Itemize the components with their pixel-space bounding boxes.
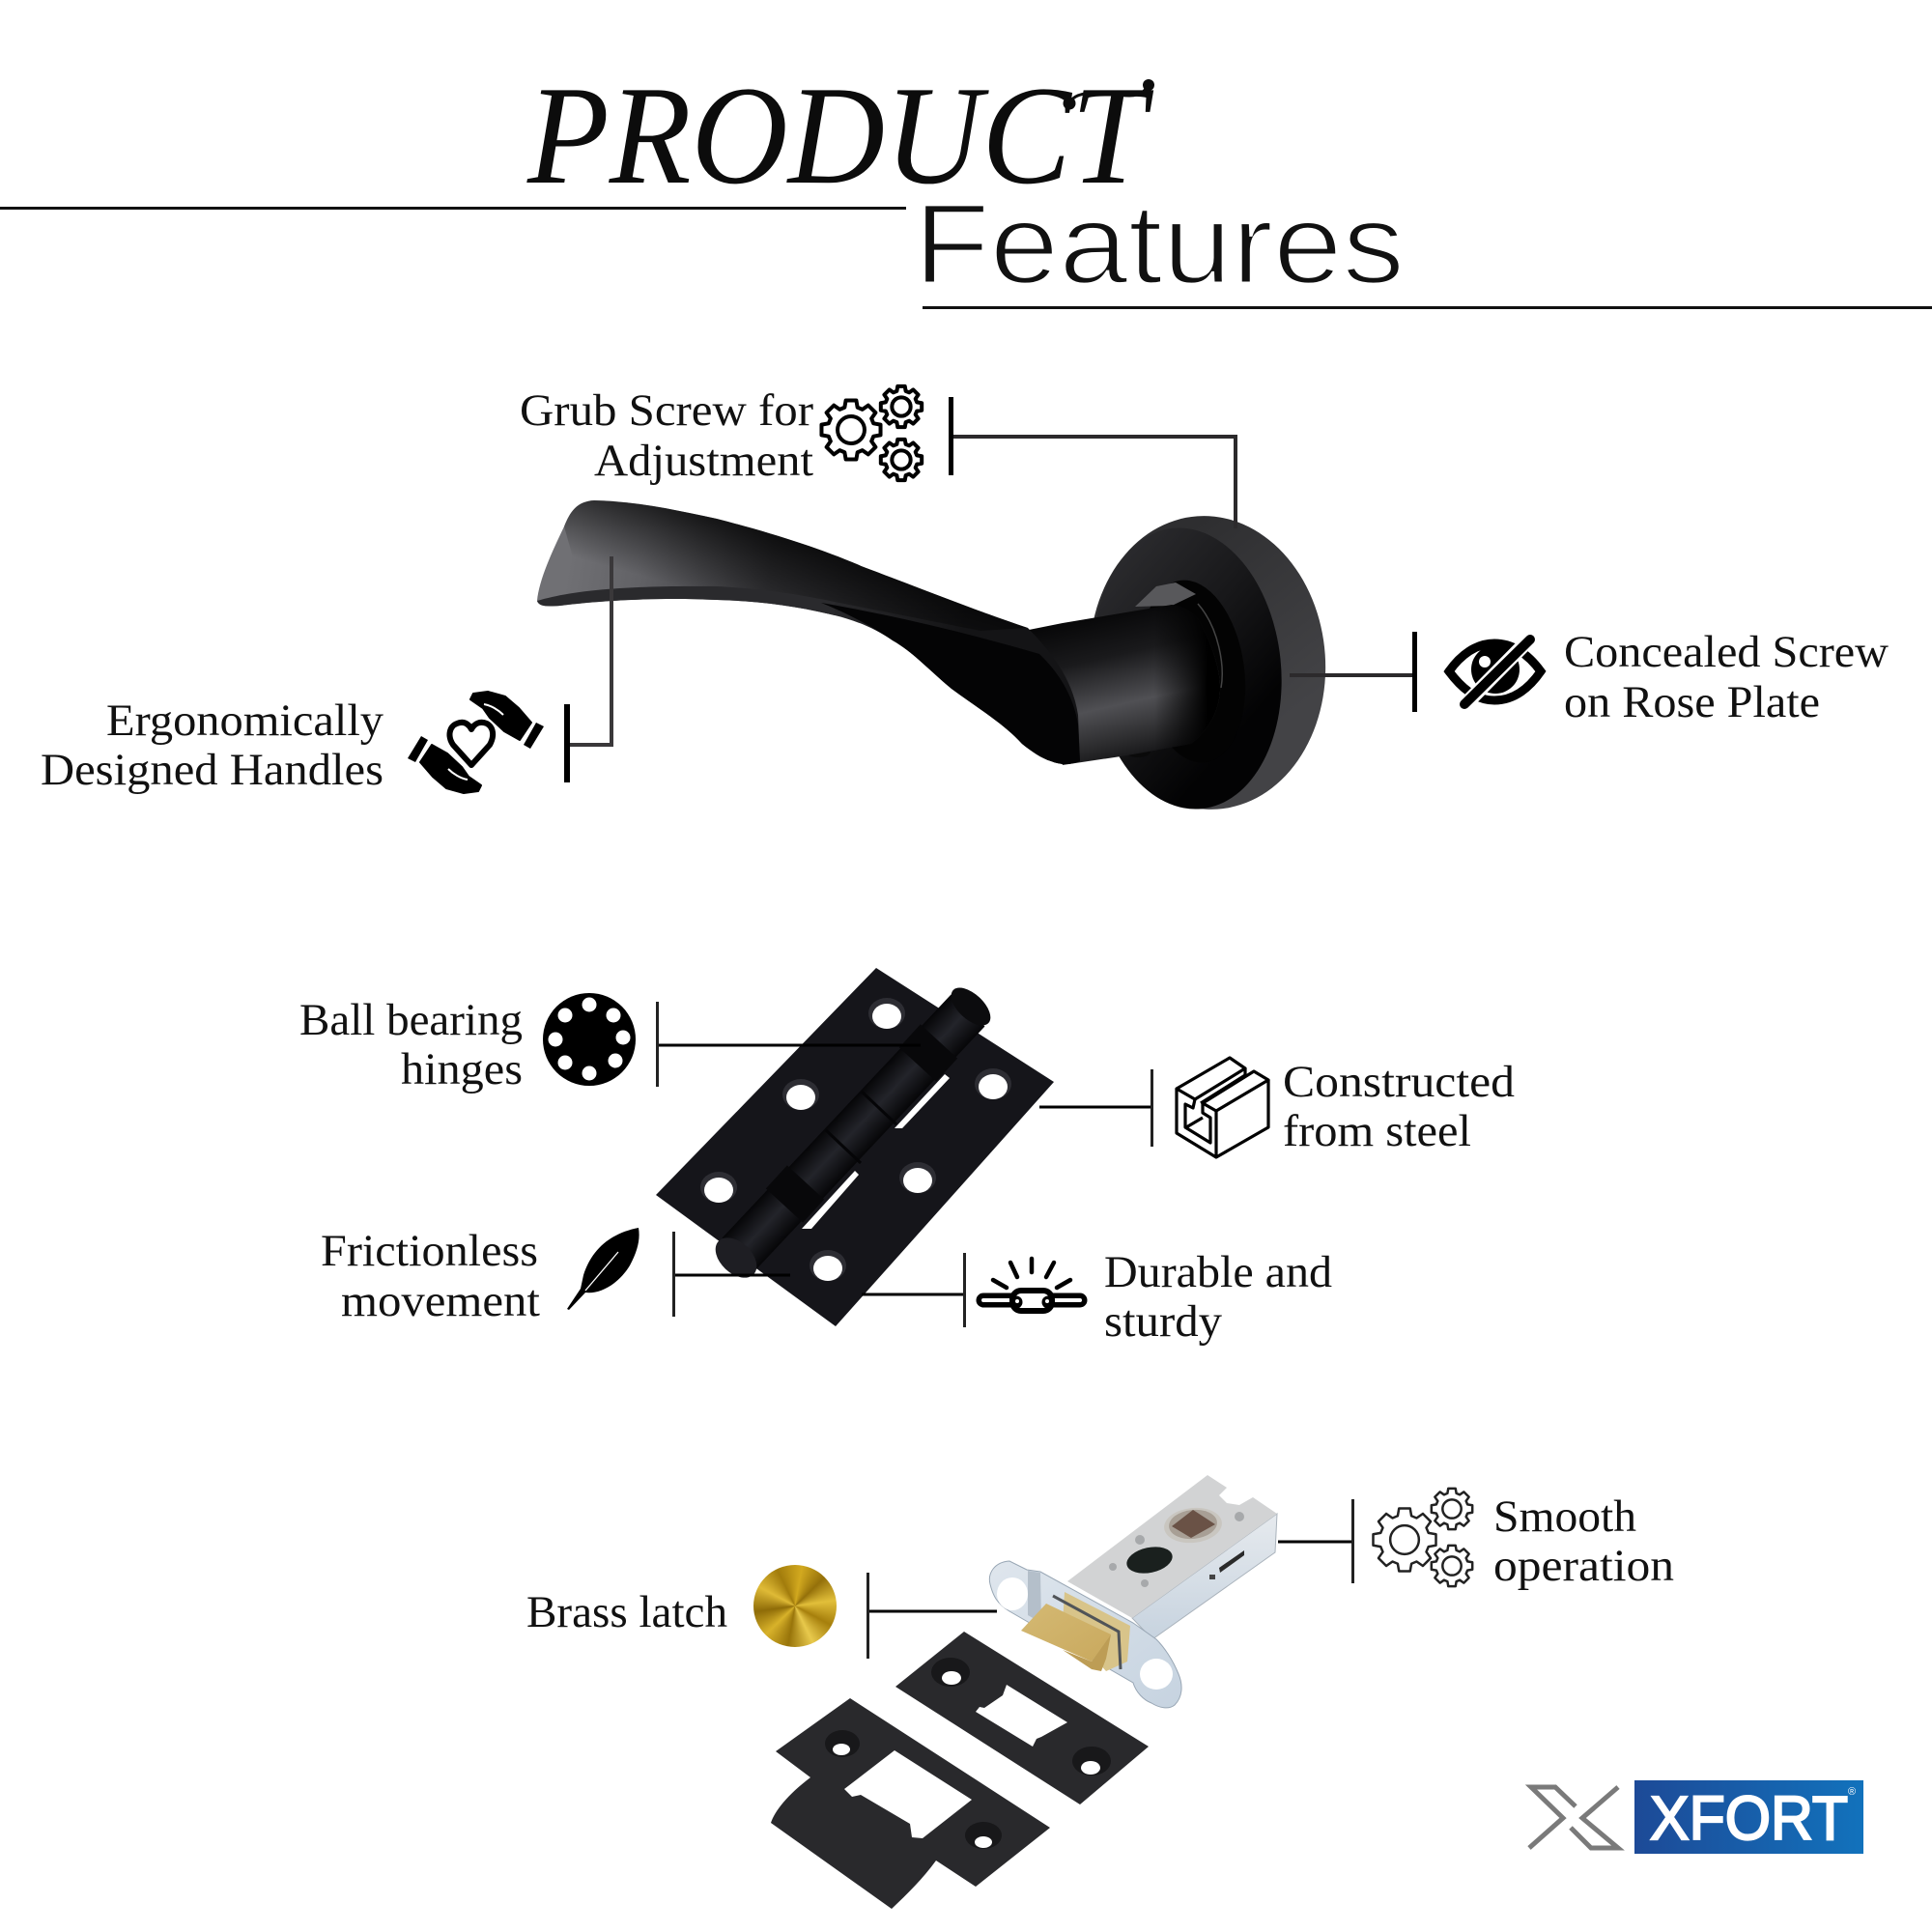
latch flange fold [1028, 1571, 1041, 1623]
latch spindle hole [1162, 1505, 1224, 1546]
text: ball bearing label: hinges [401, 1044, 523, 1094]
icon: ball bearing [543, 993, 636, 1086]
connector bar: ball bearing [656, 1002, 659, 1087]
latch face plate [989, 1561, 1181, 1708]
text: steel label [1283, 1057, 1515, 1156]
icon: crossed eye [1449, 635, 1541, 709]
hinge lower collar [784, 1182, 806, 1206]
text: frictionless label: movement [341, 1276, 540, 1326]
logo registered mark: ® [1848, 1786, 1856, 1798]
handle neck shade [1154, 605, 1220, 751]
lever top shade [564, 500, 1028, 631]
text: ergonomic label: Designed Handles [41, 745, 384, 795]
latch side slot [1219, 1550, 1244, 1573]
lever body [537, 500, 1080, 764]
connector: steel [1039, 1105, 1151, 1109]
strike plate lower slot [844, 1750, 972, 1838]
hinge pin barrel [739, 1010, 968, 1254]
latch brass backing [1063, 1592, 1130, 1671]
connector bar: smooth operation [1351, 1499, 1354, 1583]
callout: frictionless movement [321, 1226, 790, 1326]
strike plate upper slot [976, 1685, 1067, 1747]
callout: concealed screw [1290, 627, 1889, 727]
text: steel label: from steel [1283, 1106, 1471, 1156]
icon: gears thin [1373, 1489, 1472, 1586]
text: brass latch label: Brass latch [526, 1587, 727, 1637]
latch bolt end [1063, 1634, 1111, 1671]
product: tubular latch [989, 1475, 1277, 1708]
connector bar: ergonomic [564, 704, 570, 782]
lever lower rim [537, 586, 835, 615]
connector: brass latch [867, 1609, 997, 1613]
connector bar: steel [1151, 1069, 1153, 1147]
text: grub screw label [520, 385, 813, 486]
connector: grub screw [951, 437, 1236, 528]
logo text: XFORT [1650, 1783, 1848, 1853]
latch side face [1132, 1514, 1277, 1639]
text: durable label: sturdy [1104, 1296, 1223, 1347]
connector bar: grub screw [949, 397, 953, 475]
icon: feather [567, 1228, 639, 1310]
connector: frictionless [673, 1273, 790, 1277]
callout: constructed from steel [1039, 1057, 1515, 1157]
connector: durable [862, 1293, 964, 1296]
logo mark: X [1529, 1787, 1618, 1848]
hinge countersinks [700, 998, 1011, 1281]
latch brass bolt [1021, 1604, 1111, 1662]
callout: ball bearing hinges [299, 993, 921, 1094]
text: smooth operation label [1493, 1492, 1674, 1591]
text: frictionless label [321, 1226, 540, 1326]
icon: chain with rays [983, 1259, 1080, 1311]
latch top face [1067, 1475, 1277, 1618]
icon: gears [821, 386, 922, 480]
handle lever [537, 500, 1080, 764]
logo badge [1634, 1780, 1863, 1854]
title flourish [1063, 79, 1154, 110]
product: strike plate upper [895, 1632, 1149, 1804]
hinge plate [656, 968, 1054, 1326]
handle small screw [1125, 746, 1151, 757]
callout: brass latch [526, 1573, 997, 1659]
text: ergonomic label: Ergonomically [106, 696, 384, 746]
product: hinge [656, 968, 1054, 1326]
callout: ergonomic handles [41, 556, 611, 795]
text: ergonomic label [41, 696, 384, 795]
latch side slot small [1209, 1575, 1215, 1579]
text: ball bearing label [299, 995, 523, 1094]
text: smooth operation label: operation [1493, 1541, 1674, 1591]
connector bar: frictionless [672, 1232, 675, 1317]
handle rose plate rim [1080, 508, 1335, 817]
hinge knuckle rings [826, 1092, 896, 1163]
product: strike plate lower [771, 1698, 1050, 1909]
icon: hands holding heart [408, 692, 544, 793]
text: grub screw label: Adjustment [594, 436, 813, 486]
lever black facet [821, 603, 1080, 764]
callout: grub screw [520, 385, 1236, 528]
strike plate lower holes [825, 1730, 1002, 1849]
text: durable label [1104, 1247, 1332, 1347]
text: steel label: Constructed [1283, 1057, 1515, 1107]
icon: steel channel [1177, 1058, 1268, 1157]
connector bar: durable [963, 1253, 966, 1327]
text: concealed screw label: Concealed Screw [1564, 627, 1889, 677]
text: grub screw label: Grub Screw for [520, 385, 813, 436]
connector: ball bearing [657, 1043, 921, 1047]
connector: ergonomic [567, 556, 611, 745]
text: ball bearing label: Ball bearing [299, 995, 523, 1045]
text: durable label: Durable and [1104, 1247, 1332, 1297]
text: concealed screw label: on Rose Plate [1564, 677, 1820, 727]
text: concealed screw label [1564, 627, 1889, 727]
latch bolt holder [1053, 1596, 1121, 1669]
handle recess highlight [1135, 582, 1196, 607]
callout: smooth operation [1278, 1489, 1674, 1591]
hinge screw holes [704, 1004, 1008, 1281]
latch ear holes [997, 1577, 1028, 1610]
handle inner recess [1129, 574, 1257, 769]
connector: concealed screw [1290, 673, 1414, 677]
strike plate upper holes [931, 1658, 1111, 1776]
title word: Features: Features [914, 181, 1405, 308]
connector bar: brass latch [867, 1573, 869, 1659]
callout: durable and sturdy [862, 1247, 1332, 1347]
latch rivets [1109, 1512, 1244, 1587]
handle rose plate face [1079, 519, 1295, 818]
hinge upper collar [918, 1041, 939, 1065]
latch oval hole [1124, 1543, 1175, 1577]
text: frictionless label: Frictionless [321, 1226, 538, 1276]
hinge slots [802, 1074, 950, 1229]
handle recess arc [1198, 604, 1222, 688]
connector: smooth operation [1278, 1540, 1352, 1544]
title word: PRODUCT: PRODUCT [526, 57, 1153, 213]
icon: brass disc [753, 1565, 837, 1647]
hinge pin ends [945, 980, 997, 1033]
logo: XFORT [1529, 1780, 1863, 1854]
strike plate lower body [771, 1698, 1050, 1909]
product: door handle [537, 500, 1335, 818]
title rule left [0, 207, 906, 210]
title rule right [923, 306, 1932, 309]
handle neck [1014, 605, 1220, 765]
connector bar: concealed screw [1412, 632, 1417, 712]
strike plate upper body [895, 1632, 1149, 1804]
text: smooth operation label: Smooth [1493, 1492, 1636, 1542]
title: PRODUCT Features [0, 57, 1932, 309]
